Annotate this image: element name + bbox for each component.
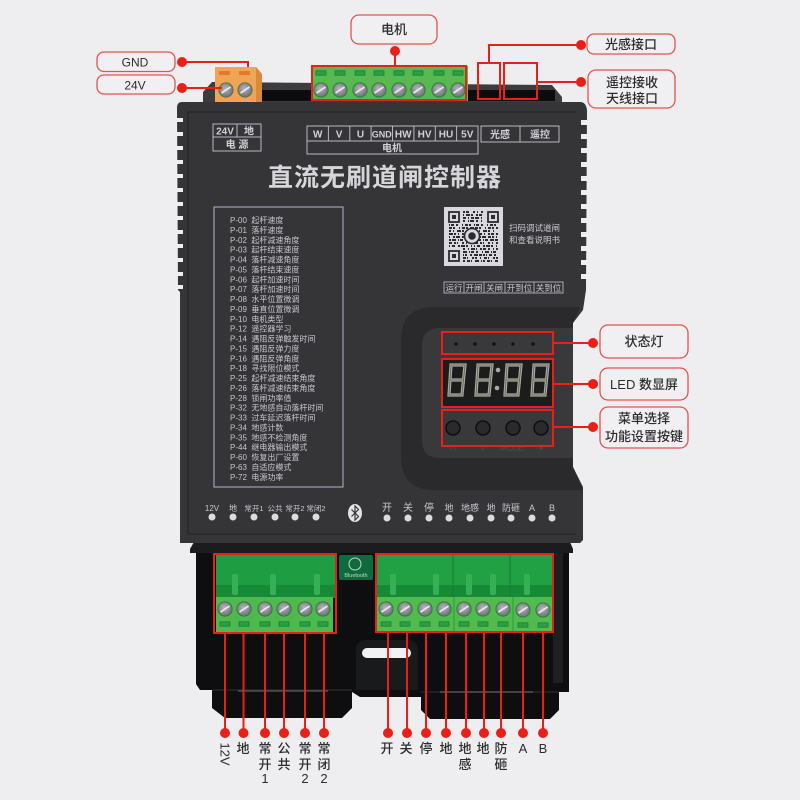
callout: remote antenna port: 遥控接收 [606, 75, 658, 90]
mounting slot [362, 648, 411, 658]
menu buttons: ∧ [449, 444, 457, 453]
display recess [401, 307, 583, 490]
callout: status lights: 状态灯 [624, 334, 664, 349]
motor table: U [357, 130, 364, 140]
QR caption: 和查看说明书 [509, 235, 561, 245]
callout: menu keys [553, 407, 688, 448]
parameter list: P-16 遇阻反弹角度 [230, 353, 299, 363]
power table: 地 [244, 124, 254, 138]
status LEDs [454, 342, 535, 346]
right terminal vertical labels: 地 [476, 741, 490, 756]
status row labels: 开闸 [465, 283, 483, 293]
left terminal vertical labels: 1 [261, 771, 269, 786]
motor table: 电机 [382, 142, 402, 154]
right terminal labels: 地 [486, 502, 496, 513]
icon: bluetooth [348, 504, 362, 522]
parameter list: P-10 电机类型 [230, 314, 283, 324]
status row labels: 关闸 [486, 283, 503, 293]
parameter list: P-25 起杆减速结束角度 [230, 373, 315, 383]
power table: 24V [216, 126, 234, 138]
right cooling fins [581, 120, 588, 279]
menu buttons: MODE [500, 444, 524, 453]
parameter list: P-33 过车延迟落杆时间 [230, 413, 315, 423]
parameter list: P-26 落杆减速结束角度 [230, 383, 315, 393]
parameter list: P-01 落杆速度 [230, 225, 283, 235]
motor table [307, 126, 478, 154]
motor table: HV [418, 130, 432, 140]
LED digits [449, 365, 548, 395]
callout: remote antenna port: 天线接口 [606, 91, 658, 106]
green motor terminal [312, 66, 468, 101]
left terminal vertical labels: 开 [258, 757, 272, 772]
parameter list: P-35 地感不检测角度 [230, 432, 307, 442]
bluetooth tag: Bluetooth [344, 573, 368, 579]
status row labels: 运行 [445, 283, 463, 293]
controller body [176, 102, 588, 543]
status row labels: 关到位 [536, 283, 562, 293]
left terminal vertical labels: 开 [298, 757, 312, 772]
right green terminal block [377, 555, 552, 632]
parameter list: P-08 水平位置微调 [230, 294, 299, 304]
callout: light sensor port [489, 34, 675, 63]
left terminal labels: 常开2 [285, 504, 305, 513]
right terminal labels: 开 [382, 503, 392, 514]
callout: 24V [97, 75, 222, 94]
right terminal vertical labels: 感 [458, 757, 472, 772]
left cooling fins [176, 118, 183, 289]
left terminal vertical labels: 公 [277, 741, 291, 756]
parameter list: P-06 起杆加速时间 [230, 274, 299, 284]
lower terminal housing [190, 542, 573, 719]
callout: motor [351, 15, 437, 66]
right terminal labels: B [549, 503, 555, 513]
right terminal vertical labels: B [539, 741, 547, 756]
callout: LED display: LED 数显屏 [610, 377, 678, 392]
right terminal labels: 停 [424, 501, 434, 514]
status row labels: 开到位 [507, 283, 533, 293]
callout: light sensor port: 光感接口 [605, 37, 657, 52]
right terminal labels: 地感 [461, 502, 479, 513]
left terminal vertical labels: 12V [218, 742, 232, 766]
right terminal vertical labels: A [519, 741, 528, 756]
parameter list: P-09 垂直位置微调 [230, 304, 299, 314]
callout: menu keys: 功能设置按键 [605, 429, 683, 444]
left terminal vertical labels: 常 [258, 741, 272, 756]
right terminal vertical labels: 地 [458, 741, 472, 756]
parameter list [214, 207, 343, 487]
title: 直流无刷道闸控制器 [268, 164, 501, 192]
parameter list: P-34 地感计数 [230, 422, 283, 432]
parameter list: P-63 自适应模式 [230, 462, 291, 472]
motor table: HU [439, 130, 453, 140]
right terminal vertical labels: 防 [494, 741, 508, 756]
left terminal vertical labels: 2 [320, 771, 328, 786]
left terminal vertical labels: 常 [317, 741, 331, 756]
motor table: HW [395, 130, 412, 140]
parameter list: P-14 遇阻反弹触发时间 [230, 334, 315, 344]
left terminal vertical labels [218, 741, 331, 786]
power table: 电 源 [226, 138, 248, 151]
parameter list: P-02 起杆减速角度 [230, 235, 299, 245]
QR caption: 扫码调试道闸 [509, 223, 560, 233]
motor table: 5V [461, 130, 474, 140]
sensor table: 遥控 [530, 128, 550, 141]
parameter list: P-05 落杆结束速度 [230, 264, 299, 274]
QR code [444, 207, 503, 266]
right terminal labels: 关 [403, 501, 413, 514]
callout: remote antenna port [537, 70, 675, 108]
bluetooth tag [339, 555, 373, 580]
right terminal vertical labels: 停 [419, 741, 433, 756]
right terminal labels: 地 [444, 502, 454, 513]
left terminal vertical labels: 闭 [317, 757, 331, 772]
sensor table [481, 126, 559, 142]
left terminal labels: 常闭2 [306, 504, 326, 513]
left terminal vertical labels: 常 [298, 741, 312, 756]
parameter list: P-18 寻找限位模式 [230, 363, 299, 373]
right terminal labels [382, 501, 556, 522]
callout: menu keys: 菜单选择 [618, 411, 670, 426]
red highlight frames [214, 63, 553, 633]
right terminal labels: 防砸 [502, 502, 520, 513]
left terminal vertical labels: 共 [277, 757, 291, 772]
left terminal labels: 地 [229, 503, 237, 513]
left green terminal block [216, 555, 335, 632]
power table [213, 124, 261, 151]
sensor table: 光感 [490, 128, 510, 141]
parameter list: P-04 落杆减速角度 [230, 254, 299, 264]
QR caption [509, 223, 561, 245]
left terminal labels: 常开1 [244, 504, 264, 513]
left terminal vertical labels: 地 [236, 741, 250, 756]
left terminal vertical labels: 2 [301, 771, 309, 786]
menu buttons: ▣ [537, 444, 545, 453]
parameter list: P-07 落杆加速时间 [230, 284, 299, 294]
callout: GND: GND [122, 56, 149, 70]
parameter list: P-03 起杆结束速度 [230, 245, 299, 255]
parameter list: P-15 遇阻反弹力度 [230, 343, 299, 353]
parameter list: P-32 无地感自动落杆时间 [230, 403, 323, 413]
parameter list: P-28 锁闸功率值 [230, 393, 291, 403]
parameter list: P-60 恢复出厂设置 [230, 452, 299, 462]
left terminal labels: 12V [205, 504, 220, 513]
parameter list: P-44 继电器输出模式 [230, 442, 307, 452]
LED window [443, 359, 553, 406]
status row labels [444, 282, 563, 293]
motor table: W [313, 130, 323, 140]
callout: GND [97, 52, 248, 72]
callout: 24V: 24V [124, 78, 146, 92]
right terminal labels: A [529, 503, 535, 513]
left terminal labels [205, 503, 326, 520]
parameter list: P-00 起杆速度 [230, 215, 283, 225]
right terminal vertical labels: 开 [380, 741, 394, 756]
callout: motor: 电机 [381, 22, 407, 37]
left terminal labels: 公共 [268, 504, 283, 513]
right terminal vertical labels: 地 [439, 741, 453, 756]
orange power terminal [215, 67, 262, 102]
motor table: V [336, 130, 343, 140]
right terminal vertical labels [380, 741, 547, 772]
menu buttons: ∨ [479, 444, 487, 453]
parameter list: P-72 电源功率 [230, 472, 283, 482]
display panel [422, 328, 573, 458]
top rear housing strip [203, 82, 562, 106]
right terminal vertical labels: 砸 [494, 757, 508, 772]
callout: LED display [553, 368, 688, 400]
left wiring leaders [220, 633, 329, 738]
motor table: GND [372, 130, 392, 140]
menu buttons [446, 421, 548, 453]
callout: status lights [553, 325, 688, 358]
right wiring leaders [383, 632, 548, 738]
parameter list: P-12 遥控器学习 [230, 324, 291, 334]
right terminal vertical labels: 关 [399, 741, 413, 756]
